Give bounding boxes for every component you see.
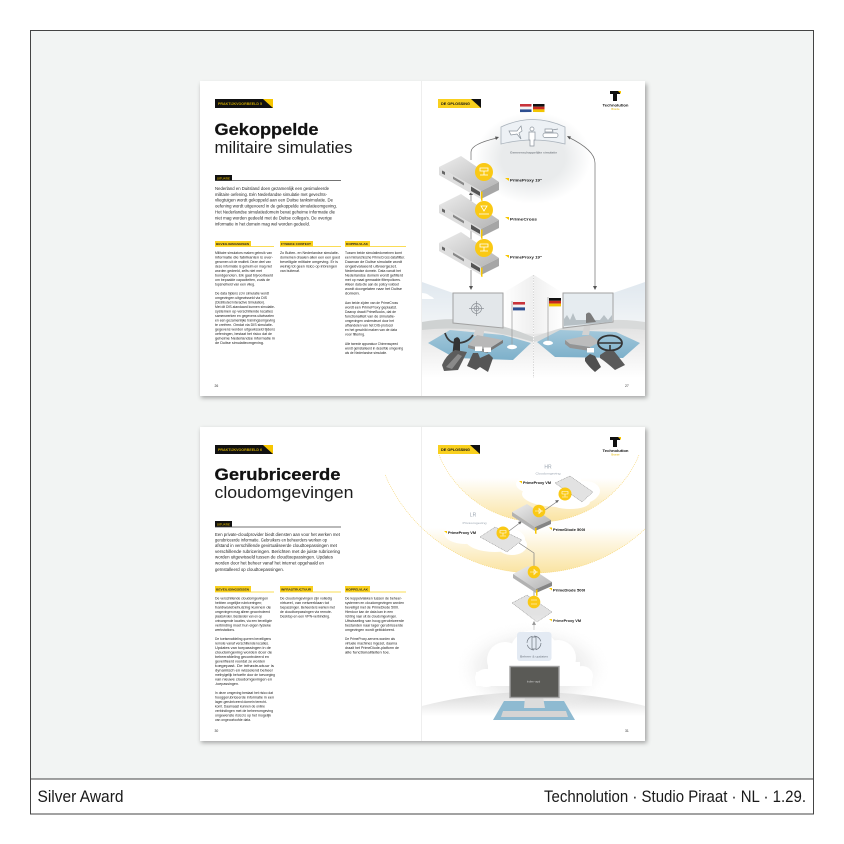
situatie text: Nederland en Duitsland doen gezamenlijk een gesimuleerde: [215, 186, 329, 191]
column: beveiligingseisen: bondgenoten. Elk gaat bijvoorbeeld: [215, 274, 273, 278]
common simulation halo: [475, 112, 591, 204]
title spread 1: [214, 120, 352, 157]
column: koppelvlak 2: [345, 586, 406, 654]
column: koppelvlak 2: draait het PrimeDiode-platform de: [345, 646, 399, 650]
PrimeDiode label top: [549, 528, 585, 532]
column: oplossing: omgevingen ondersteunt door het: [345, 319, 394, 323]
award label: Silver Award: [38, 788, 124, 806]
situatie text: oefening wordt uitgevoerd in de gekoppelde simulatieomgeving.: [215, 204, 337, 208]
PrimeDiode label bottom: [549, 588, 585, 592]
column: beveiligingseisen 2: De verschillende cloudomgevingen: [215, 596, 268, 600]
column: beveiligingseisen 2: De toetsenafdeling queren beveiligens: [215, 637, 271, 641]
column: beveiligingseisen 2: methylgelijk behoefte door de toevoeging: [215, 673, 275, 677]
flag NL pole: [507, 301, 525, 349]
column: beveiligingseisen: De data tijdens zo'n simulatie wordt: [215, 292, 269, 296]
logo 2: Technolution: [602, 449, 628, 453]
situatie text: informatie in het domein mag wel worden gedeeld.: [215, 221, 310, 226]
yellow zones: [385, 455, 645, 574]
column: oplossing: [345, 241, 406, 355]
column: beveiligingseisen 2: plaatsvinden. Bestanden van en op: [215, 614, 262, 618]
keyboard: [501, 711, 568, 717]
situatie text: [215, 186, 337, 226]
column: oplossing: wordt doorgelaten naar het Duitse: [345, 287, 402, 291]
column: oplossing: Nederlandse domein wordt gefilterd: [345, 274, 403, 278]
column: koppelvlak 2: alle functionaliteiten toe.: [345, 650, 390, 654]
icon badge: [558, 488, 572, 500]
solution tag 2: DE OPLOSSING: [441, 448, 470, 452]
column: beveiligingseisen: en een gezamenlijke trainingsomgeving: [215, 318, 275, 322]
column: koppelvlak 2: bestanden naar lager gerubriceerde: [345, 624, 403, 628]
column: beveiligingseisen 2: beheerafdeling gecontroleerd en: [215, 655, 269, 659]
monitor right: [563, 293, 613, 335]
label: PrimeProxy 19": [510, 178, 542, 182]
label: PrimeCross: [510, 216, 538, 222]
blue desk right: [537, 330, 640, 358]
caption: Beheer & updates: [520, 654, 549, 658]
column: koppelvlak 2: richting naar uit de cloudomgevingen.: [345, 614, 397, 618]
column: beveiligingseisen 2: verbindingen met de beheeromgeving: [215, 709, 273, 713]
plate HR: [555, 476, 593, 502]
column: infrastructuur: Desktop en een VPN-verbinding.: [280, 614, 330, 618]
arrows spread 2: [509, 500, 559, 633]
column: koppelvlak 2: systemen en cloudomgevingen worden: [345, 601, 404, 605]
page number 26: 26: [214, 384, 218, 388]
solution tag 1: [438, 99, 481, 108]
HR label: HR: [544, 464, 552, 470]
column: oplossing: Alleen data die aan de policy voldoet: [345, 282, 399, 286]
column: oplossing: een hiërarchische PrimeCross dataflitter.: [345, 256, 405, 260]
page number 31: 31: [625, 729, 629, 733]
column: beveiligingseisen 2: In deze omgeving bestaat het risico dat: [215, 691, 273, 695]
monitor left: [453, 293, 503, 337]
column: oplossing: KOPPELVLAK: [346, 242, 369, 246]
icon badge: [475, 201, 493, 219]
column: beveiligingseisen 2: verbinding moet hun eigen fysieke: [215, 624, 271, 628]
diode bottom: [513, 566, 552, 596]
column: fysieke context: [280, 241, 341, 273]
column: oplossing: ongeëvalueerd uitvoergezet.: [345, 264, 397, 268]
label: PrimeProxy 19": [510, 254, 542, 260]
big cloud: [475, 630, 593, 687]
left page 1 heading tag: [215, 99, 273, 108]
icon badge: [533, 505, 545, 517]
credits: Technolution · Studio Piraat · NL · 1.29.: [544, 788, 806, 806]
column: beveiligingseisen: (Distributed Interactive Simulation).: [215, 300, 265, 304]
column: infrastructuur: INFRASTRUCTUUR: [281, 587, 312, 591]
column: beveiligingseisen: oefeningen, bestaat het risico dat de: [215, 332, 272, 336]
title spread 2: cloudomgevingen: [214, 483, 354, 502]
column: beveiligingseisen: BEVEILIGINGSEISEN: [216, 242, 249, 246]
column: infrastructuur: de cloudtoepassingen via remote-: [280, 610, 332, 614]
spread 2: [198, 426, 650, 746]
situatie text 2: verschillende rubriceringen. Berichten met de juiste rubricering: [215, 549, 340, 554]
column: beveiligingseisen 2: hebben ongelijke rubriceringen;: [215, 601, 262, 605]
column: koppelvlak 2: virtuele machines ingezet, daarna: [345, 642, 397, 646]
server: PrimeCross: [439, 194, 538, 239]
plate LR: [480, 526, 522, 552]
title spread 2: Gerubriceerde: [214, 465, 340, 484]
column: oplossing: Daarop draait PrimeBooks, dat de: [345, 310, 396, 314]
column: oplossing: Alle tweede apparatuur Chimeraspeed: [345, 342, 398, 346]
column: beveiligingseisen: topsnelheid van een vlieg.: [215, 282, 255, 286]
situatie text 2: [215, 532, 341, 572]
screen text: Indien vapd: [527, 680, 541, 684]
situatie tag: [215, 175, 341, 181]
icon badge: [496, 526, 510, 540]
column: beveiligingseisen 2: omgevingen mag alleen gecontroleerd: [215, 610, 270, 614]
column: fysieke context: weinig tot geen risico op inbrengen: [280, 264, 337, 268]
icon: crosshair: [469, 301, 484, 316]
column: beveiligingseisen 2: hooggerubriceerde informatie in een: [215, 696, 274, 700]
column: beveiligingseisen 2: Updates van toepassingen in de: [215, 646, 271, 650]
spread 1: [200, 81, 647, 398]
situatie text 2: worden door het beheer vanaf het internet opgehaald en: [215, 561, 324, 566]
column: oplossing: voor filtering.: [345, 332, 365, 336]
column: beveiligingseisen 2: -toepassingen.: [215, 682, 239, 686]
logo 1: Bronze: [611, 107, 620, 111]
tank silhouette: [586, 312, 596, 323]
column: beveiligingseisen: Met dit DIS-standaard kunnen simulatie-: [215, 305, 275, 309]
column: beveiligingseisen: om bepaalde capaciteiten, zoals de: [215, 278, 270, 282]
ground arc: [422, 692, 645, 722]
cloud LR: [444, 504, 527, 555]
caption: Gemeenschappelijke simulatie: [510, 150, 557, 154]
flight stick left: [442, 333, 473, 371]
column: fysieke context: van buitenaf.: [280, 269, 300, 273]
column: oplossing: domein.: [345, 292, 360, 296]
PrimeDiode label top: PrimeDiode 500I: [553, 528, 585, 532]
big cloud glow: [461, 623, 605, 707]
LR sublabel: Privéomgeving: [462, 521, 487, 525]
situatie text 2: afstand in verschillende gevirtualiseerde cloudtoepassingen met: [215, 543, 338, 548]
column: koppelvlak 2: KOPPELVLAK: [346, 587, 369, 591]
title spread 2: [214, 465, 354, 502]
page number 27: 27: [625, 384, 629, 388]
situatie text 2: geïnstalleerd op cloudtoepassingen.: [215, 567, 284, 572]
column: beveiligingseisen 2: [215, 586, 275, 722]
column: beveiligingseisen: geheime Nederlandse informatie in: [215, 336, 275, 340]
left page 1 heading tag: PRAKTIJKVOORBEELD 5: [218, 102, 262, 106]
solution tag 2: [438, 445, 480, 454]
column: beveiligingseisen: deze informatie is geheim en mag niet: [215, 264, 272, 268]
column: oplossing: met op maat gemaakte filterpolicers.: [345, 278, 401, 282]
cloud HR: [516, 456, 600, 509]
column: beveiligingseisen 2: van nieuwe cloudomgevingen en: [215, 678, 272, 682]
title spread 1: Gekoppelde: [214, 120, 318, 139]
column: fysieke context: Zo Buiten- en Nederlandse simulatie-: [280, 251, 339, 255]
column: beveiligingseisen 2: van ongeoorloofde data.: [215, 718, 251, 722]
column: oplossing: Daarvan de Duitse simulatie wordt: [345, 260, 402, 264]
situatie tag: SITUATIE: [217, 176, 230, 180]
console left: [468, 335, 503, 353]
title spread 1: militaire simulaties: [214, 138, 352, 157]
column: beveiligingseisen 2: ongewenste risico's op het mogelijk: [215, 714, 271, 718]
column: beveiligingseisen: de Duitse simulatieomgeving.: [215, 341, 264, 345]
icon: person: [529, 127, 535, 146]
logo 1: Technolution: [602, 104, 628, 108]
icon: update cycle: [527, 636, 541, 650]
column: infrastructuur: virtueel, van netwerklaan tot: [280, 601, 329, 605]
flag DE pole: [543, 297, 561, 345]
monitor: [510, 666, 559, 708]
scene backdrop left: [422, 275, 533, 378]
column: infrastructuur: De cloudomgevingen zijn volledig: [280, 596, 332, 600]
left page 2 heading tag: [215, 445, 273, 454]
situatie text: Het Nederlandse simulatiedomein bevat geheime informatie die: [215, 209, 335, 214]
column: beveiligingseisen: [215, 241, 275, 345]
scene backdrop right: [534, 275, 645, 378]
flags NL DE: [520, 104, 544, 112]
column: beveiligingseisen 2: toegepast. De infrastructuur is: [215, 664, 274, 668]
situatie text: militaire oefening. Eén Nederlandse simulatie met gevechts-: [215, 192, 327, 197]
column: koppelvlak 2: Uitwisseling van hoog gerubriceerde: [345, 619, 404, 623]
column: koppelvlak 2: Hierdoor kan de data kan in een: [345, 610, 393, 614]
column: oplossing: wordt een PrimeProxy geplaatst.: [345, 306, 397, 310]
throttles left: [467, 346, 493, 372]
arrows spread 1: [469, 136, 597, 290]
desk mat: [493, 701, 575, 720]
column: beveiligingseisen 2: dynamisch en wisselend beheer: [215, 668, 274, 672]
diode top: [512, 504, 551, 534]
situatie text 2: worden uitgewisseld tussen de cloudtoepassingen. Updates: [215, 555, 334, 560]
column: oplossing: functionaliteit van de simulatie-: [345, 314, 395, 318]
column: infrastructuur: [280, 586, 341, 618]
solution tag 1: DE OPLOSSING: [441, 102, 470, 106]
logo 2: Bronze: [611, 452, 620, 456]
column: beveiligingseisen 2: hardwarebehuizing kunnen de: [215, 606, 271, 610]
column: beveiligingseisen 2: lager-gerubriceerd domein terecht-: [215, 700, 267, 704]
column: oplossing: Tussen beide simulatiedomeinen komt: [345, 251, 402, 255]
server: PrimeProxy bottom: [439, 232, 542, 277]
column: beveiligingseisen 2: cloudomgeving worden door de: [215, 650, 272, 654]
column: koppelvlak 2: beveiligd met de PrimeDiode 500I.: [345, 606, 399, 610]
LR label: LR: [470, 512, 477, 518]
blue desk left: [428, 330, 531, 360]
column: oplossing: wordt geïnstalleerd in dezelfde omgeving: [345, 346, 403, 350]
HR sublabel: Cloudomgeving: [536, 472, 561, 476]
PrimeProxy VM label left: PrimeProxy VM: [448, 531, 476, 535]
situatie tag 2: SITUATIE: [217, 522, 230, 526]
column: beveiligingseisen: te creëren. Omdat via DIS simulatie-: [215, 323, 273, 327]
column: oplossing: Nederlandse domein. Data vanuit het: [345, 269, 401, 273]
PrimeProxy VM label bottom: PrimeProxy VM: [553, 619, 581, 623]
steering wheel and pedals right: [585, 336, 625, 372]
column: oplossing: als de Nederlandse simulatie.: [345, 351, 387, 355]
column: oplossing: en het geschikt maken van de data: [345, 328, 397, 332]
column: beveiligingseisen: worden gedeeld, zelfs niet met: [215, 269, 262, 273]
column: fysieke context: beveiligde militaire omgeving. Er is: [280, 260, 338, 264]
left page 2 heading tag: PRAKTIJKVOORBEELD 6: [218, 448, 262, 452]
logo 1: [602, 91, 628, 111]
column: beveiligingseisen: Militaire simulators maken gebruik van: [215, 251, 272, 255]
situatie text: niet mag worden gedeeld met de Duitse collega's. De overige: [215, 215, 332, 220]
logo 2: [602, 437, 628, 456]
beheer box: [517, 632, 552, 661]
column: infrastructuur: toepassingen. Beheerders werken met: [280, 606, 335, 610]
icon badge: [475, 163, 493, 181]
icon: aircraft: [509, 126, 522, 139]
column: fysieke context: domeinen draaien allen een een goed: [280, 256, 340, 260]
column: beveiligingseisen 2: geverifieerd voordat ze worden: [215, 660, 265, 664]
column: beveiligingseisen: systemen op verschillende locaties: [215, 310, 273, 314]
icon badge: [475, 239, 493, 257]
PrimeDiode label bottom: PrimeDiode 500I: [553, 588, 585, 592]
situatie text 2: Een private-cloudprovider biedt diensten aan voor het werken met: [215, 532, 341, 537]
common simulation panel: [501, 120, 565, 154]
PrimeProxy VM label top: PrimeProxy VM: [523, 481, 551, 485]
column: beveiligingseisen 2: werkstations.: [215, 628, 235, 632]
situatie text: vliegtuigen wordt gekoppeld aan een Duitse tanksimulatie. De: [215, 198, 333, 203]
footer bar: [30, 779, 814, 814]
column: fysieke context: FYSIEKE CONTEXT: [281, 242, 311, 246]
column: koppelvlak 2: De PrimeProxy-servers worden als: [345, 637, 395, 641]
console right: [565, 335, 600, 351]
column: beveiligingseisen 2: komt. Daarnaast kunnen de online: [215, 704, 265, 708]
column: beveiligingseisen: gegevens worden uitgewisseld tijdens: [215, 328, 275, 332]
column: oplossing: afhandelen van het DIS-protocol: [345, 324, 393, 328]
server: PrimeProxy top: [439, 156, 542, 201]
column: beveiligingseisen: samenwerken en gegevens uitwisselen: [215, 314, 274, 318]
column: beveiligingseisen: informatie die fabrikanten is over-: [215, 256, 273, 260]
column: beveiligingseisen 2: BEVEILIGINGSEISEN: [216, 587, 249, 591]
icon badge: [528, 566, 540, 578]
column: oplossing: Aan beide zijden van de PrimeCross: [345, 301, 398, 305]
column: beveiligingseisen: omgevingen uitgewisseld via DIS: [215, 296, 268, 300]
column: koppelvlak 2: De koppelvlakken tussen de beheer-: [345, 596, 402, 600]
situatie text 2: gerubriceerde informatie. Gebruikers en beheerders werken op: [215, 538, 327, 543]
page number 30: 30: [214, 729, 218, 733]
column: beveiligingseisen: genomen uit de realiteit. Deze deel van: [215, 260, 271, 264]
icon badge: [528, 596, 540, 608]
icon: tank: [543, 129, 558, 138]
plate bottom: [512, 595, 552, 622]
column: beveiligingseisen 2: ontvangende locaties, via een beveiligde: [215, 619, 272, 623]
column: beveiligingseisen 2: remote vanaf verschillende locaties.: [215, 642, 269, 646]
situatie tag 2: [215, 521, 341, 527]
column: koppelvlak 2: omgevingen wordt geblokkeerd.: [345, 628, 395, 632]
